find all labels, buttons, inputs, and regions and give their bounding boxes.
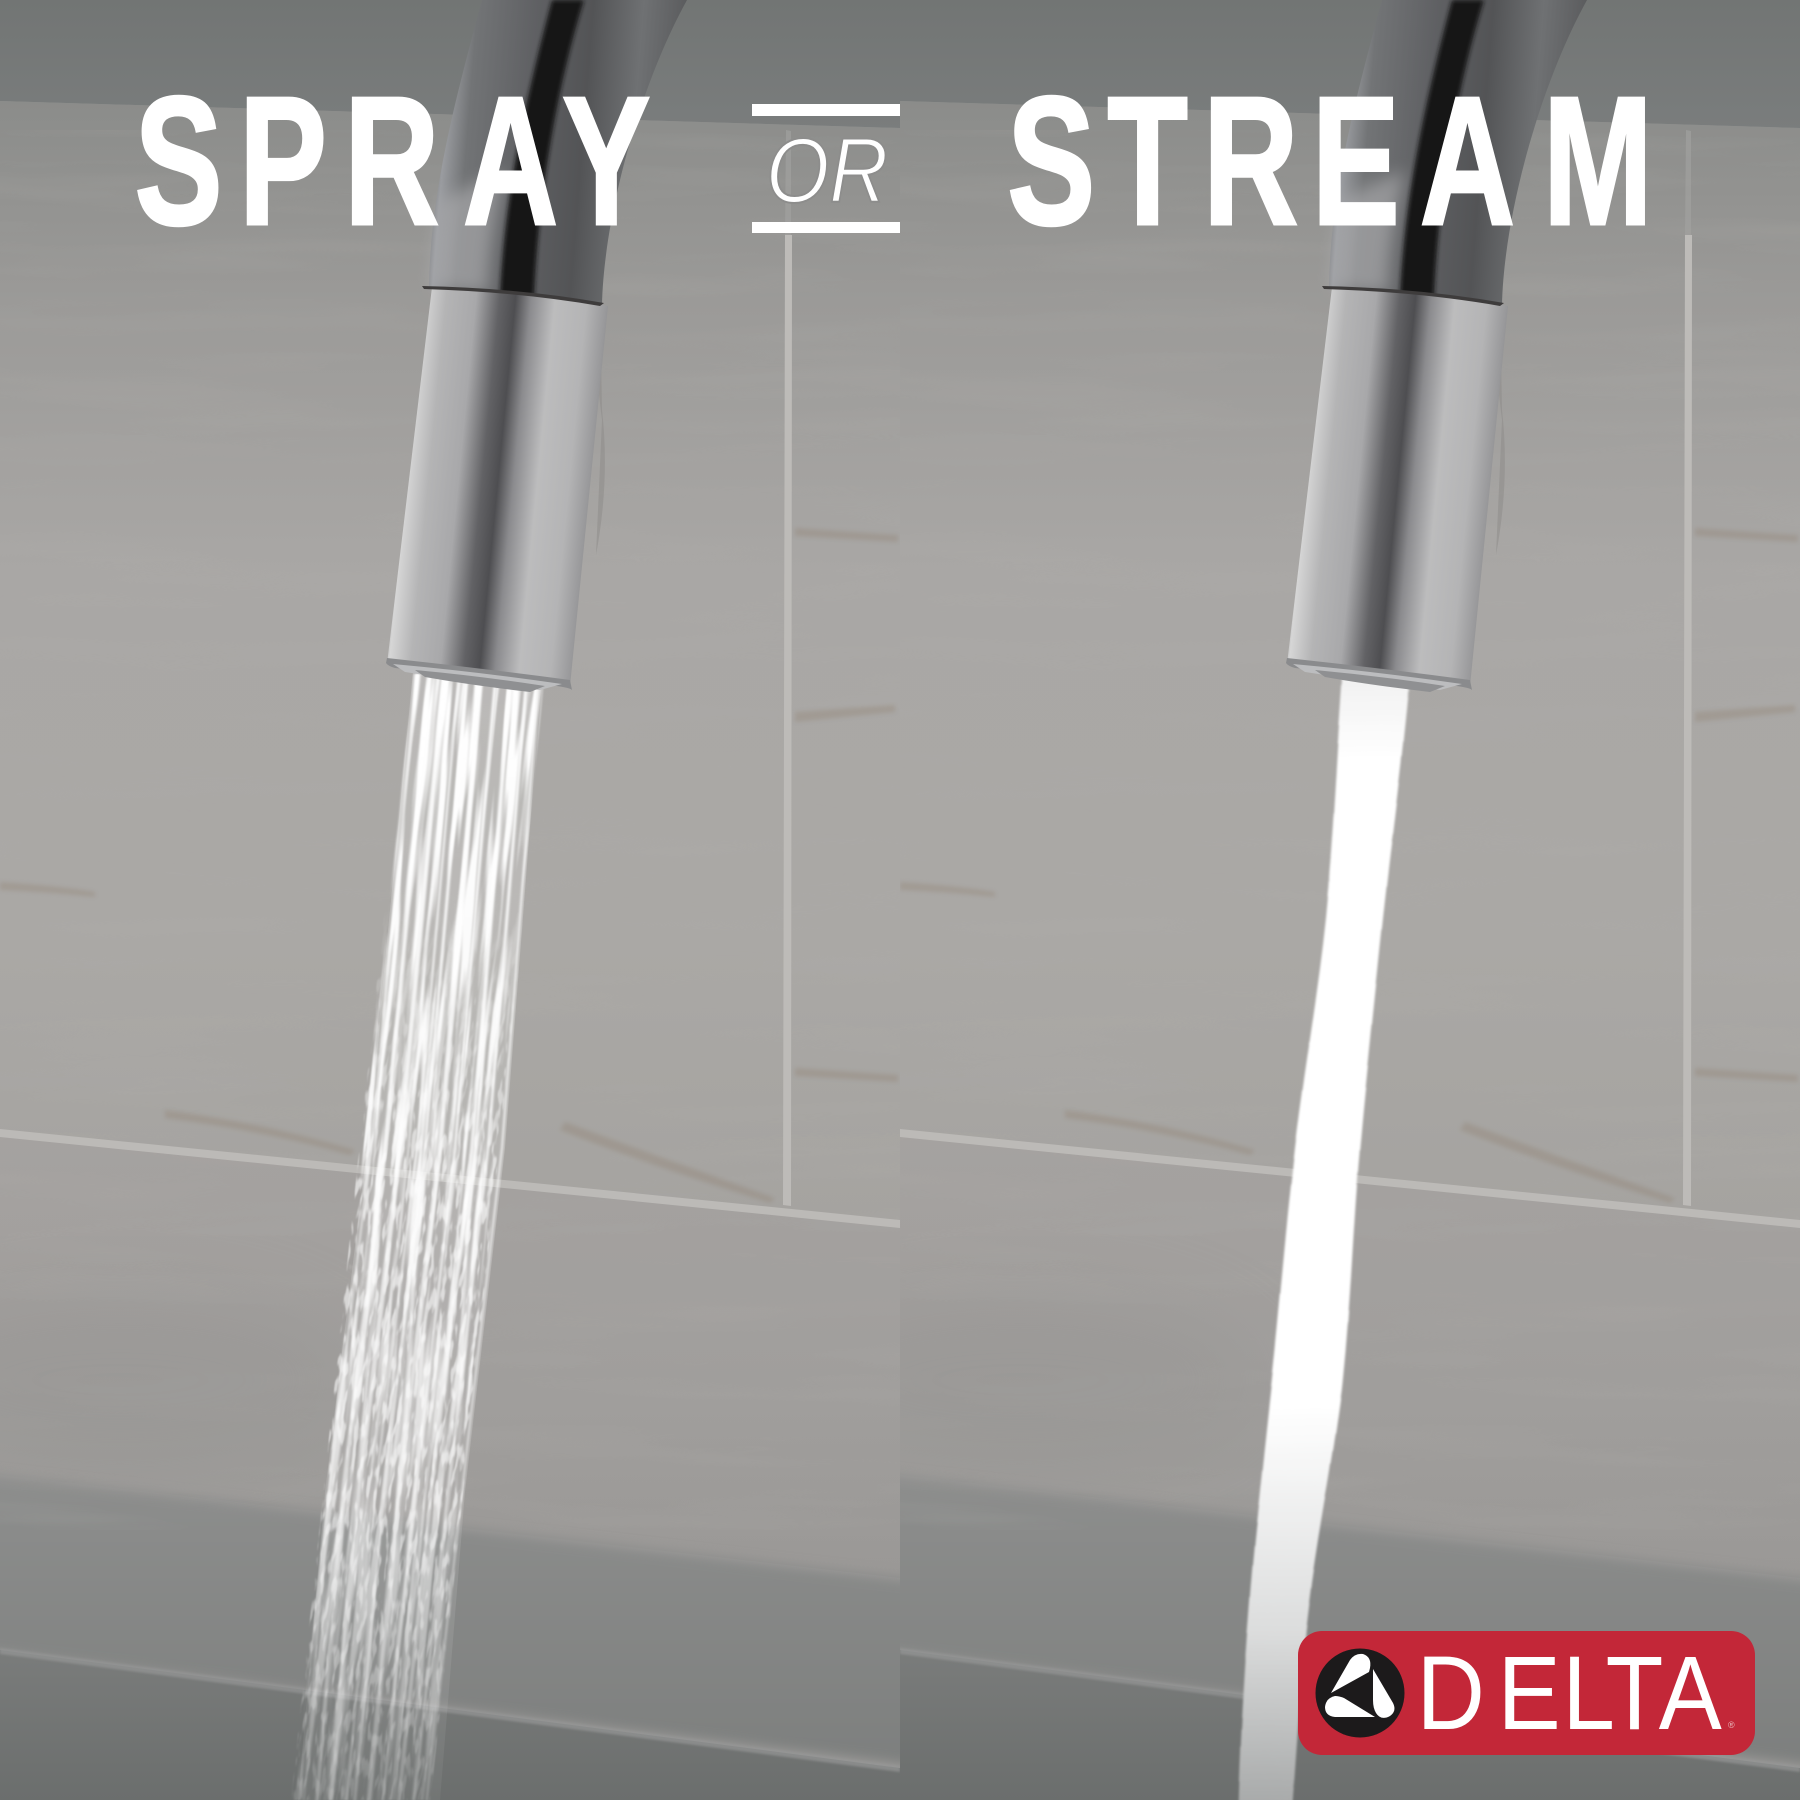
logo wordmark: DELTA [1417,1635,1722,1752]
spray water [291,672,549,1800]
OR divider with rules: OR [766,120,888,222]
panel: spray side [0,0,930,1800]
faucet: spray side [386,0,687,692]
title: STREAM: STREAM [1007,59,1653,263]
registered mark: ® [1728,1720,1735,1730]
panel: stream side [900,0,1800,1800]
logo: Delta [1298,1631,1755,1755]
solid stream of water [1238,672,1410,1800]
title: SPRAY: SPRAY [135,59,650,263]
icon: Delta triangle mark [1316,1648,1404,1738]
faucet: stream side [1286,0,1587,692]
